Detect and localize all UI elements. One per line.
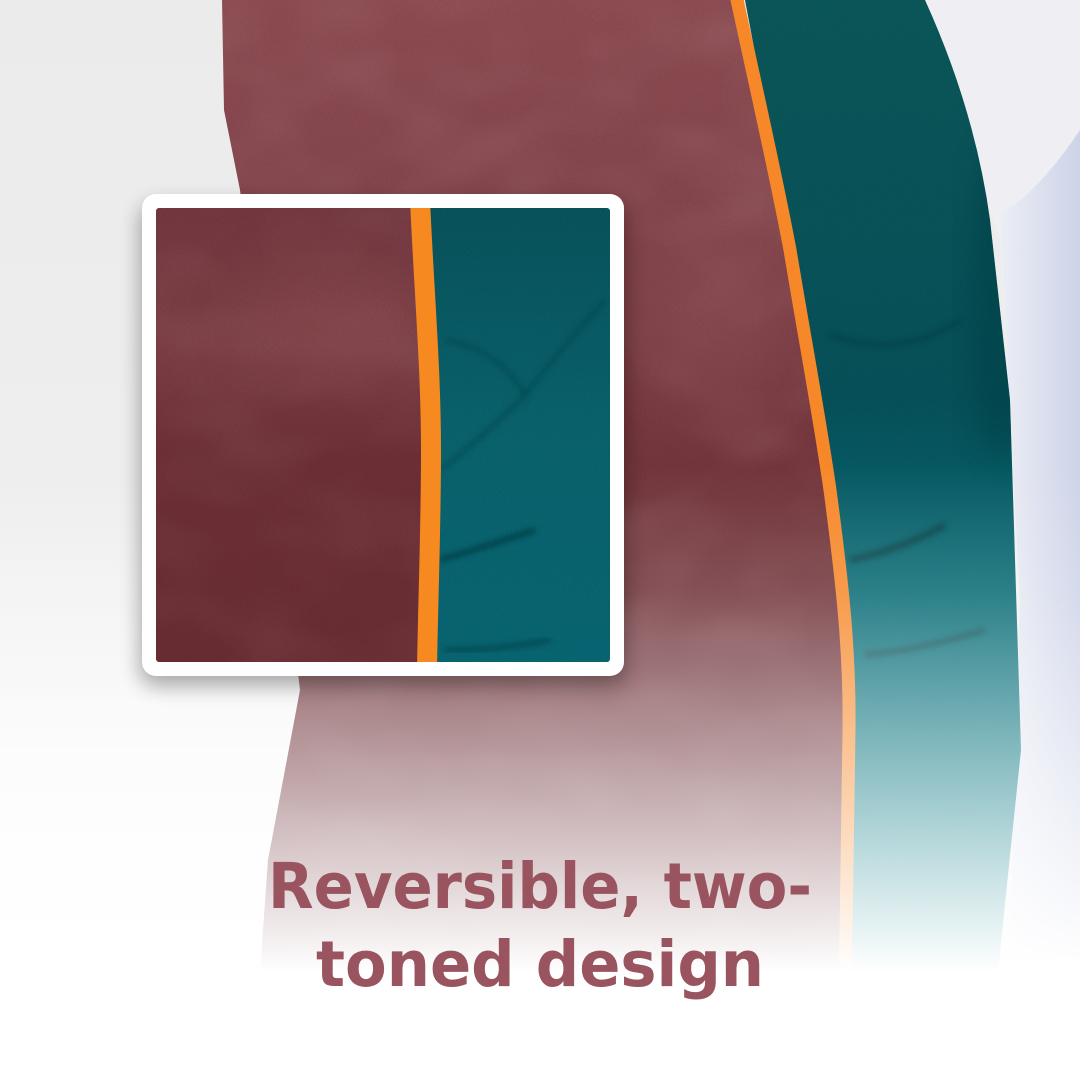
- pillow: teal velvet side: [745, 0, 1021, 958]
- background: pale shirt on the right: [920, 0, 1080, 1000]
- pillow: maroon velvet side: [222, 0, 843, 955]
- pillow: orange piping: [736, 0, 849, 1000]
- inset detail photo: [140, 194, 626, 686]
- title: toned design: [316, 928, 764, 1001]
- title: Reversible, two-: [268, 850, 812, 923]
- inset fabric close-up: [156, 200, 610, 670]
- title: [268, 850, 812, 1001]
- inset shadow: [140, 204, 626, 686]
- inset white frame: [142, 194, 624, 676]
